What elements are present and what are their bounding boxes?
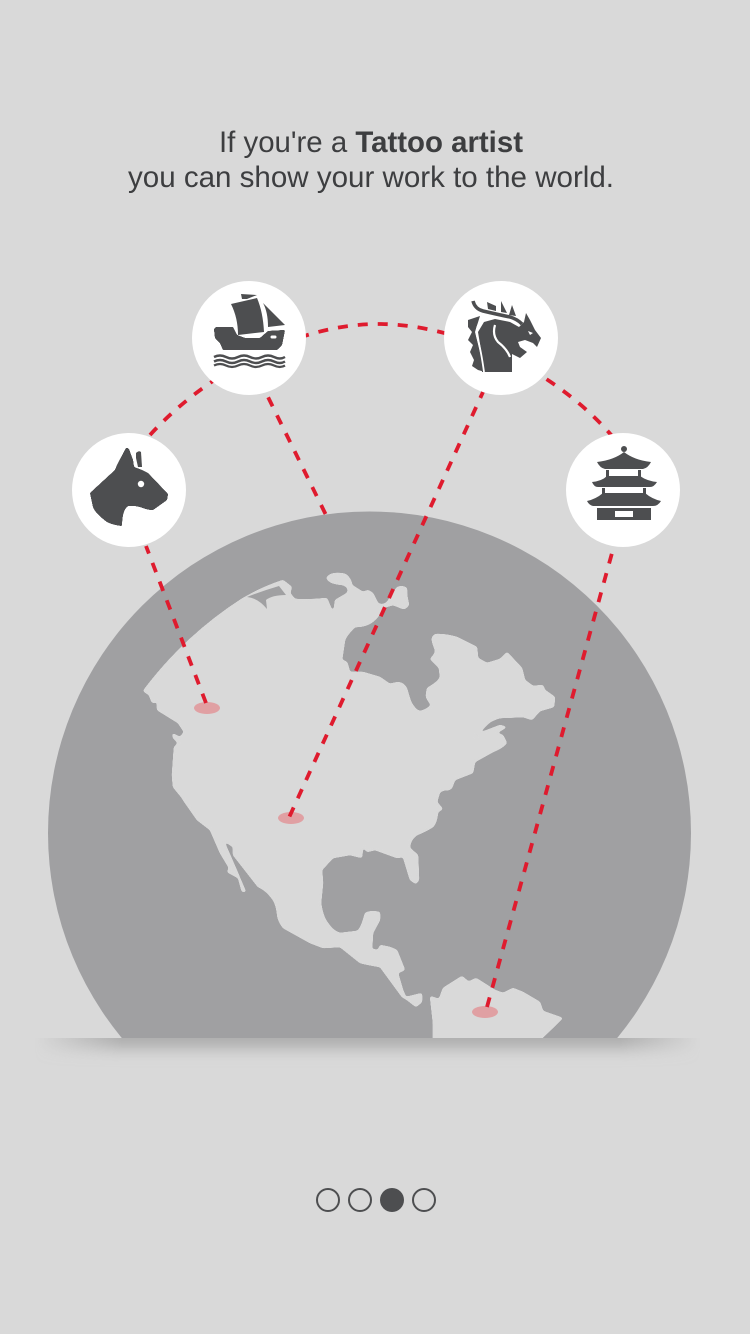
dragon connector line (290, 392, 483, 816)
title (128, 126, 614, 194)
pin: dog (194, 702, 220, 714)
icon: dragon (444, 281, 558, 395)
dog connector line (146, 546, 206, 703)
arc connecting the icons (150, 324, 612, 436)
pin: dragon (278, 812, 304, 824)
title: If you're a Tattoo artist (219, 126, 523, 159)
pagoda connector line (487, 553, 612, 1007)
ship connector line (268, 397, 326, 514)
icon: pagoda (566, 433, 680, 547)
icon: dog (72, 433, 186, 547)
inlet detail (247, 586, 286, 609)
map: North and Central America (143, 573, 555, 1007)
title: you can show your work to the world. (128, 161, 614, 194)
shadow under globe (53, 1038, 684, 1055)
icon: ship (192, 281, 306, 395)
globe (48, 512, 691, 1038)
pagination dots (317, 1188, 435, 1212)
map: South America (430, 976, 562, 1038)
pin: pagoda (472, 1006, 498, 1018)
